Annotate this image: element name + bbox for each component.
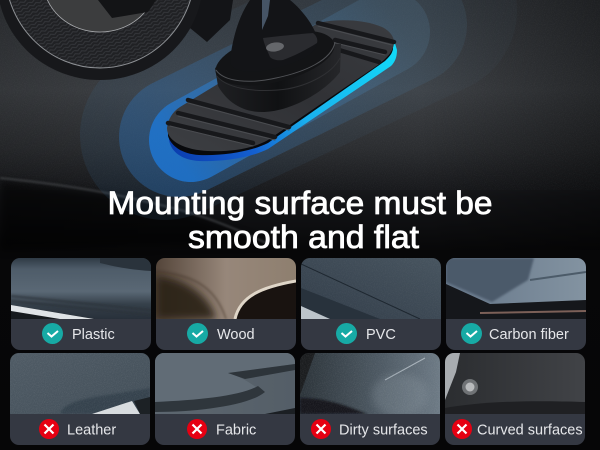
lit inner face of the neck (263, 33, 317, 60)
cross icon (187, 419, 207, 439)
card: Carbon fiber (suitable) (446, 258, 586, 350)
mount plate with blue adhesive edge (167, 20, 397, 161)
dirty surfaces label: Dirty surfaces (339, 422, 428, 438)
card: PVC (suitable) (301, 258, 441, 350)
blue glow rings around the mount plate (165, 10, 432, 140)
leather photo (10, 353, 150, 414)
leather label bar (10, 414, 150, 445)
fabric label: Fabric (216, 422, 256, 438)
cross icon (452, 419, 472, 439)
curved surface photo (445, 353, 585, 414)
dirty surface photo (300, 353, 440, 417)
fabric label bar (155, 414, 295, 445)
plastic label: Plastic (72, 327, 115, 343)
carbon fiber label: Carbon fiber (489, 327, 569, 343)
neck of the mount (230, 0, 317, 72)
pvc label: PVC (366, 327, 396, 343)
wood label bar (156, 319, 296, 350)
check icon (187, 323, 208, 344)
check icon (42, 323, 63, 344)
wood label: Wood (217, 327, 255, 343)
check icon (336, 323, 357, 344)
title: Mounting surface must be (108, 185, 492, 221)
curved surfaces label: Curved surfaces (477, 422, 583, 438)
plastic label bar (11, 319, 151, 350)
card: Dirty surfaces (unsuitable) (300, 353, 440, 445)
card: Curved surfaces (unsuitable) (445, 353, 585, 445)
curved surface label bar (445, 414, 585, 445)
cylinder base (215, 40, 341, 112)
carbon fiber label bar (446, 319, 586, 350)
dirty surface label bar (300, 414, 440, 445)
gap in the neck showing the surface (262, 0, 270, 30)
ball joint collar (210, 20, 340, 96)
logo badge (265, 41, 285, 53)
pvc label bar (301, 319, 441, 350)
phone mount (0, 0, 397, 161)
cross icon (311, 419, 331, 439)
pvc photo (301, 258, 441, 319)
cross icon (39, 419, 59, 439)
title: smooth and flat (188, 219, 419, 255)
title (108, 185, 492, 255)
leather label: Leather (67, 422, 116, 438)
plate ridges (168, 23, 394, 146)
magnetic ring with carbon fibre (0, 0, 233, 80)
carbon fiber photo (446, 258, 586, 319)
card: Leather (unsuitable) (10, 353, 150, 445)
card: Fabric (unsuitable) (155, 353, 295, 445)
wood photo (156, 258, 296, 319)
check icon (461, 323, 482, 344)
card: Wood (suitable) (156, 258, 296, 350)
plastic photo (11, 258, 151, 319)
card: Plastic (suitable) (11, 258, 151, 350)
fabric photo (155, 353, 295, 414)
